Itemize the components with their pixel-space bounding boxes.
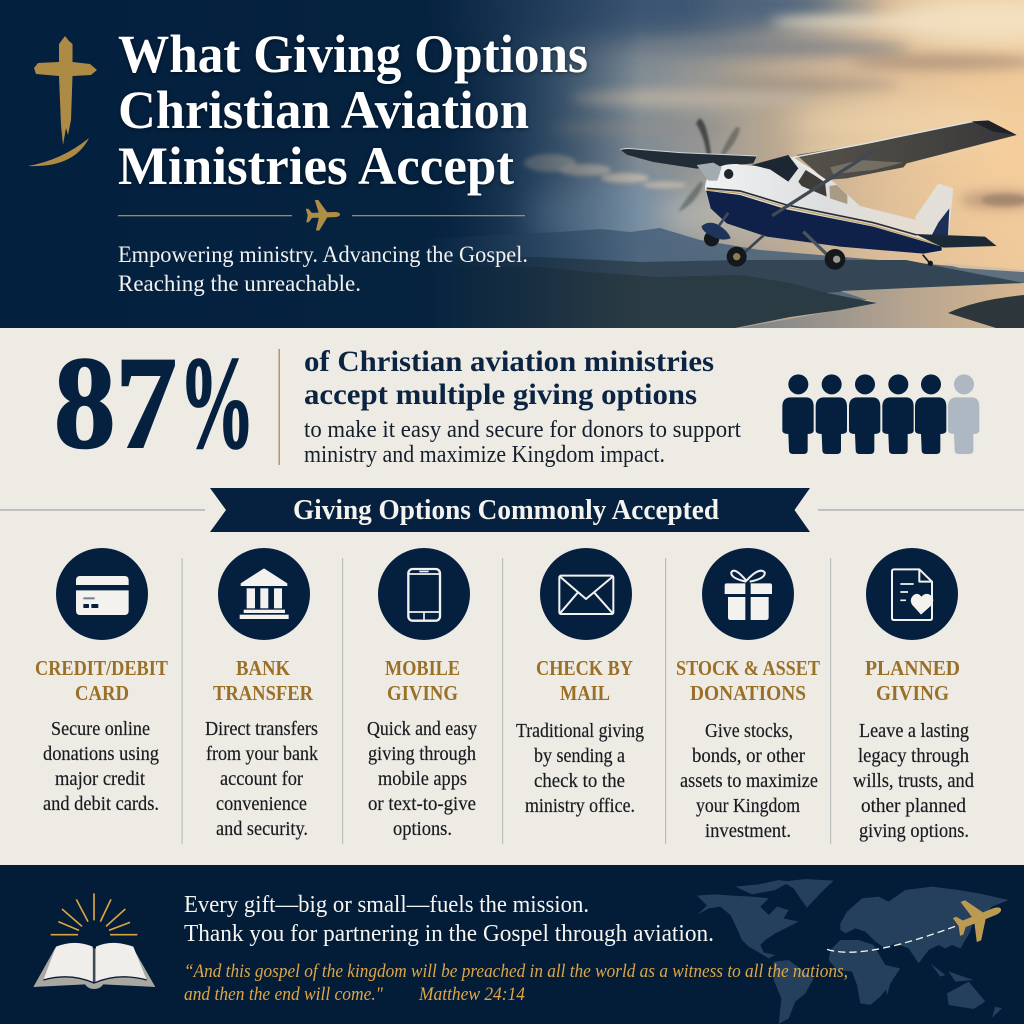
description: mobile apps <box>378 769 467 790</box>
description: and security. <box>216 819 308 840</box>
statistic description: ministry and maximize Kingdom impact. <box>304 442 665 468</box>
description: account for <box>220 769 303 790</box>
description: Secure online <box>51 719 150 740</box>
gold vertical divider <box>278 349 280 465</box>
heading: STOCK & ASSET <box>676 656 820 680</box>
description <box>43 719 159 815</box>
description: Give stocks, <box>705 721 793 742</box>
description: major credit <box>55 769 146 790</box>
column: credit/debit card <box>35 548 168 815</box>
description: Quick and easy <box>367 719 477 740</box>
heading: BANK <box>236 656 291 680</box>
description: or text-to-give <box>368 794 476 815</box>
subtitle: Reaching the unreachable. <box>118 271 361 296</box>
description: ministry office. <box>525 796 635 817</box>
scripture quote: “And this gospel of the kingdom will be preached in all the world as a witness to all the nations, <box>184 961 848 982</box>
column: bank transfer <box>205 548 318 840</box>
heading <box>676 656 820 705</box>
description: check to the <box>534 771 625 792</box>
description: your Kingdom <box>696 796 800 817</box>
far hazy mountains <box>540 228 1024 300</box>
statistic description <box>304 417 741 468</box>
subtitle: Empowering ministry. Advancing the Gospel. <box>118 242 528 267</box>
icon: gold cross <box>28 36 97 166</box>
icon: bank <box>218 548 310 640</box>
heading: DONATIONS <box>690 681 806 705</box>
heading: GIVING <box>876 681 949 705</box>
title: Christian Aviation <box>118 80 529 140</box>
description: giving options. <box>859 821 969 842</box>
scripture quote: Matthew 24:14 <box>418 984 525 1005</box>
heading: MAIL <box>560 681 610 705</box>
sky and landscape photo <box>0 0 1024 328</box>
heading <box>213 656 314 705</box>
section banner <box>0 488 1024 532</box>
description: bonds, or other <box>692 746 805 767</box>
icon: document with heart <box>866 548 958 640</box>
section banner: Giving Options Commonly Accepted <box>293 494 719 526</box>
description: Traditional giving <box>516 721 644 742</box>
statistic headline <box>304 345 714 411</box>
heading: TRANSFER <box>213 681 314 705</box>
closing message: Thank you for partnering in the Gospel through aviation. <box>184 921 714 947</box>
column dividers <box>182 558 831 844</box>
heading: CHECK BY <box>536 656 633 680</box>
heading: CARD <box>75 681 129 705</box>
statistic headline: accept multiple giving options <box>304 378 697 411</box>
description: and debit cards. <box>43 794 159 815</box>
description: by sending a <box>534 746 625 767</box>
statistic headline: of Christian aviation ministries <box>304 345 714 378</box>
description: other planned <box>861 796 966 817</box>
icon: gift <box>702 548 794 640</box>
panel: statistic <box>54 329 979 476</box>
world map with flight path <box>697 879 1009 1024</box>
title <box>118 24 588 196</box>
description: investment. <box>705 821 791 842</box>
description <box>516 721 644 817</box>
description: options. <box>393 819 452 840</box>
title: What Giving Options <box>118 24 588 84</box>
column: check by mail <box>516 548 644 817</box>
icon: credit card <box>56 548 148 640</box>
heading: PLANNED <box>865 656 960 680</box>
closing message: Every gift—big or small—fuels the mission. <box>184 892 589 918</box>
description: assets to maximize <box>680 771 818 792</box>
description: legacy through <box>858 746 969 767</box>
scripture quote: and then the end will come." <box>184 984 384 1005</box>
pictogram: five of six people <box>782 374 979 454</box>
heading: GIVING <box>387 681 458 705</box>
heading <box>385 656 460 705</box>
panel: hero header <box>0 0 1024 328</box>
subtitle <box>118 242 528 296</box>
title: Ministries Accept <box>118 136 514 196</box>
big number: % <box>179 329 255 476</box>
closing message <box>184 892 714 947</box>
divider with plane icon <box>118 199 525 231</box>
icon: envelope <box>540 548 632 640</box>
description: donations using <box>43 744 159 765</box>
description: giving through <box>368 744 476 765</box>
description <box>680 721 818 842</box>
description <box>205 719 318 840</box>
column: planned giving <box>853 548 974 842</box>
scripture quote <box>184 961 848 1005</box>
statistic description: to make it easy and secure for donors to support <box>304 417 741 443</box>
heading <box>865 656 960 705</box>
icon: gold airplane <box>948 889 1009 947</box>
heading <box>536 656 633 705</box>
column: stock and asset donations <box>676 548 820 842</box>
description: from your bank <box>206 744 318 765</box>
description <box>367 719 477 840</box>
icon: smartphone <box>378 548 470 640</box>
description <box>853 721 974 842</box>
description: Direct transfers <box>205 719 318 740</box>
column: mobile giving <box>367 548 477 840</box>
heading: CREDIT/DEBIT <box>35 656 168 680</box>
airplane <box>620 118 1017 270</box>
big number: 87 <box>54 329 177 476</box>
heading: MOBILE <box>385 656 460 680</box>
panel: footer <box>0 865 1024 1024</box>
icon: open book with rays <box>33 893 155 989</box>
description: Leave a lasting <box>859 721 969 742</box>
heading <box>35 656 168 705</box>
description: convenience <box>216 794 307 815</box>
description: wills, trusts, and <box>853 771 974 792</box>
